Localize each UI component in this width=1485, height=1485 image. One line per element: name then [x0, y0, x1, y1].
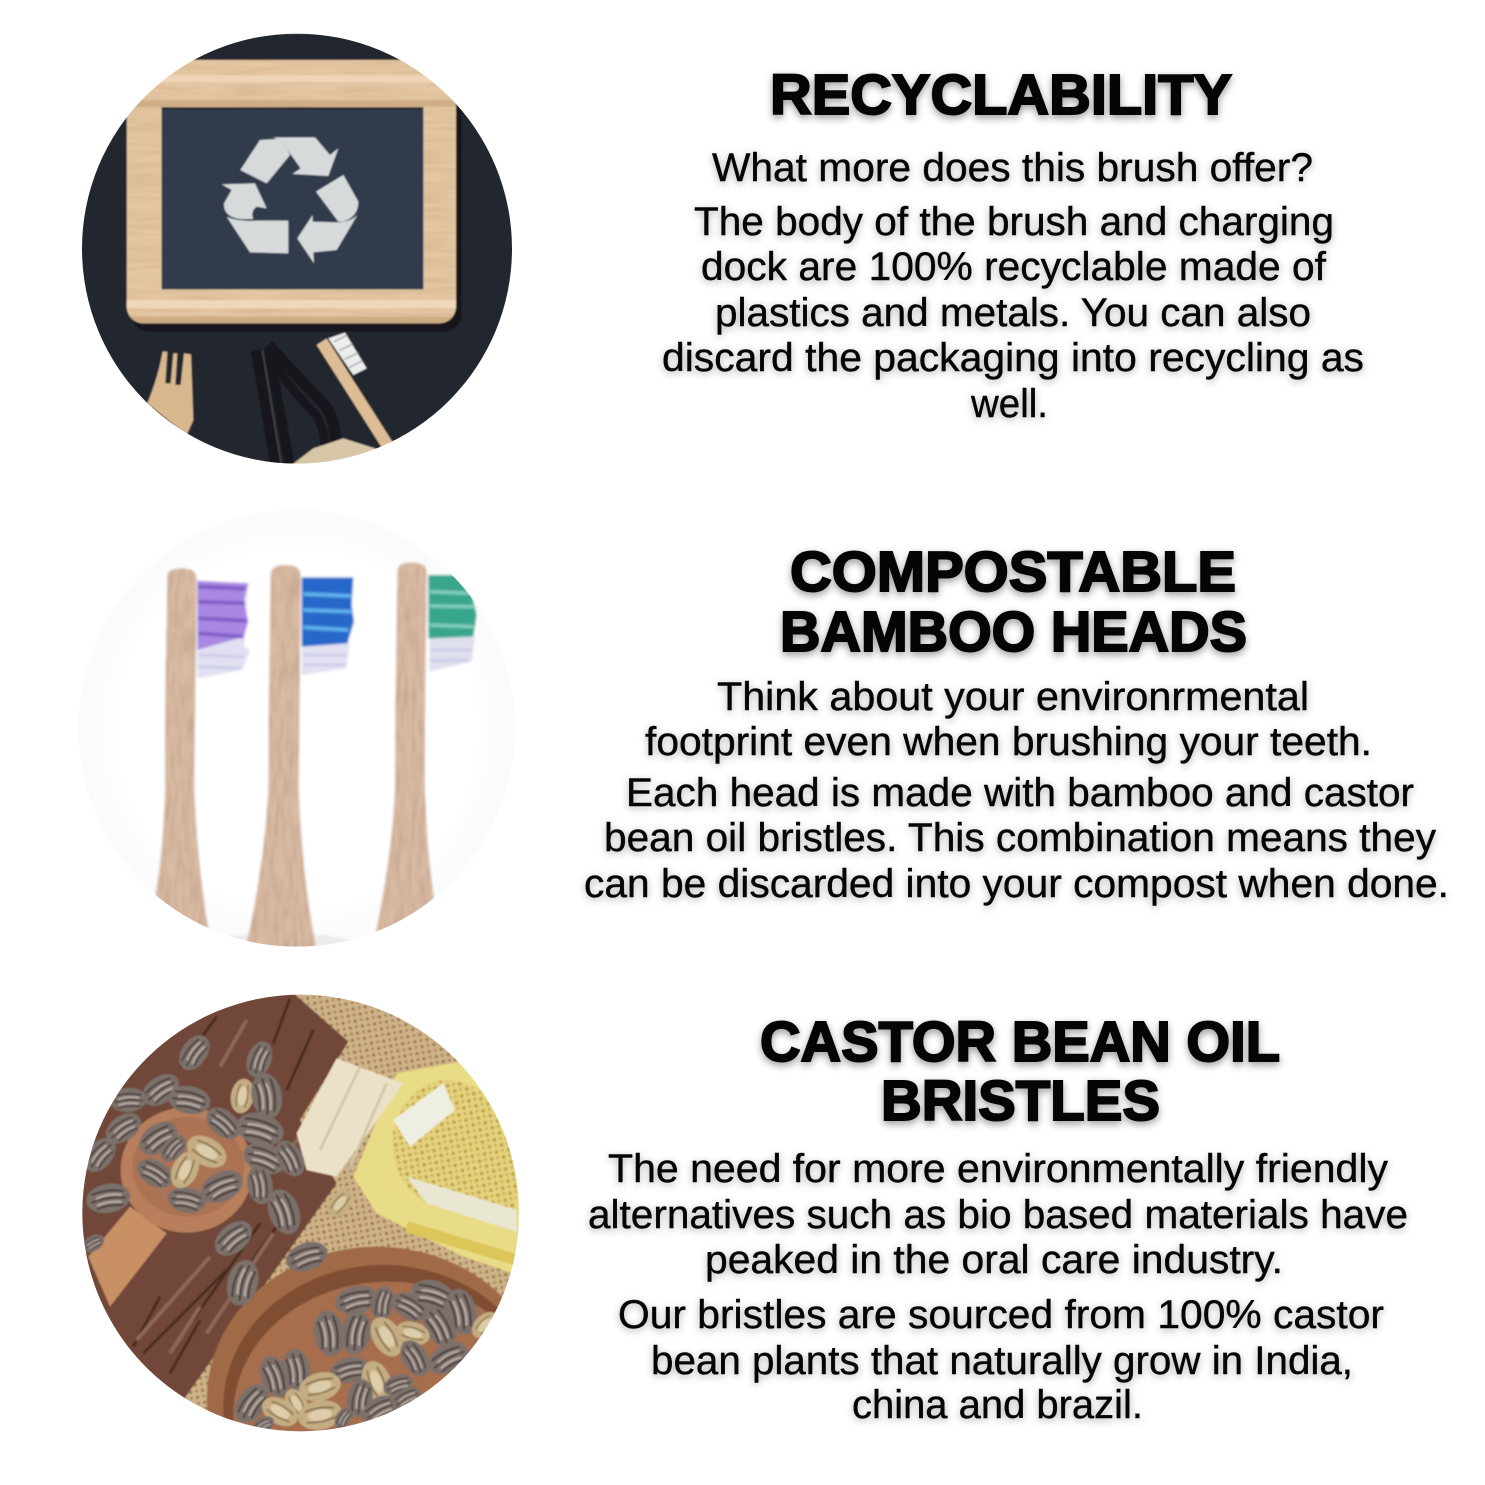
brush head: teal	[375, 562, 477, 937]
heading: castor bean oil bristles: CASTOR BEAN OIL	[760, 1010, 1280, 1074]
panel: castor bean oil bristles	[82, 994, 1410, 1432]
panel: recyclability	[80, 33, 1364, 467]
text block: castor bean description: peaked in the oral care industry.	[705, 1238, 1283, 1282]
text block: recyclability description: discard the packaging into recycling as	[662, 336, 1364, 380]
text block: compostable description: footprint even when brushing your teeth.	[645, 720, 1372, 764]
heading: castor bean oil bristles: BRISTLES	[881, 1069, 1160, 1133]
wooden frame	[127, 60, 456, 323]
castor beans	[78, 1030, 503, 1437]
heading: recyclability: RECYCLABILITY	[770, 63, 1232, 127]
icon: black straws	[257, 345, 336, 467]
oil bottle	[297, 1058, 523, 1277]
heading: compostable bamboo heads: COMPOSTABLE	[790, 540, 1236, 604]
text block: compostable description: Each head is made with bamboo and castor	[626, 771, 1414, 815]
brush head: purple	[150, 568, 250, 930]
text block: compostable description	[584, 675, 1449, 906]
heading: compostable bamboo heads: BAMBOO HEADS	[780, 600, 1247, 664]
text block: compostable description: bean oil bristles. This combination means they	[604, 816, 1436, 860]
photo: castor beans and oil bottle	[82, 994, 519, 1432]
text block: castor bean description: alternatives such as bio based materials have	[588, 1193, 1408, 1237]
text block: castor bean description	[588, 1147, 1408, 1427]
text block: recyclability description: What more does this brush offer?	[712, 146, 1313, 190]
photo: three bamboo brush heads	[154, 560, 478, 947]
text block: castor bean description: Our bristles are sourced from 100% castor	[618, 1293, 1384, 1337]
brush head: blue	[245, 565, 354, 950]
icon: bamboo toothbrush	[322, 333, 388, 447]
text block: compostable description: can be discarded into your compost when done.	[584, 862, 1449, 906]
wooden bowl	[206, 1246, 502, 1432]
wooden spoon	[88, 1107, 253, 1307]
text block: castor bean description: The need for more environmentally friendly	[608, 1147, 1388, 1191]
text block: recyclability description: plastics and metals. You can also	[715, 291, 1311, 335]
icon: wooden fork	[147, 352, 193, 435]
text block: recyclability description: well.	[970, 382, 1048, 426]
panel: compostable bamboo heads	[154, 548, 1448, 947]
text block: castor bean description: china and brazil.	[852, 1383, 1143, 1427]
photo: chalkboard with recycling symbol	[80, 33, 513, 467]
icon: mesh bag	[292, 438, 380, 467]
wooden plank	[73, 990, 348, 1400]
text block: recyclability description: The body of the brush and charging	[694, 200, 1334, 244]
heading: compostable bamboo heads	[780, 540, 1247, 664]
icon: recycling symbol	[222, 137, 358, 263]
text block: castor bean description: bean plants that naturally grow in India,	[651, 1339, 1353, 1383]
heading: castor bean oil bristles	[760, 1010, 1280, 1133]
text block: recyclability description	[662, 146, 1364, 426]
text block: recyclability description: dock are 100% recyclable made of	[701, 245, 1327, 289]
text block: compostable description: Think about your environrmental	[717, 675, 1309, 719]
